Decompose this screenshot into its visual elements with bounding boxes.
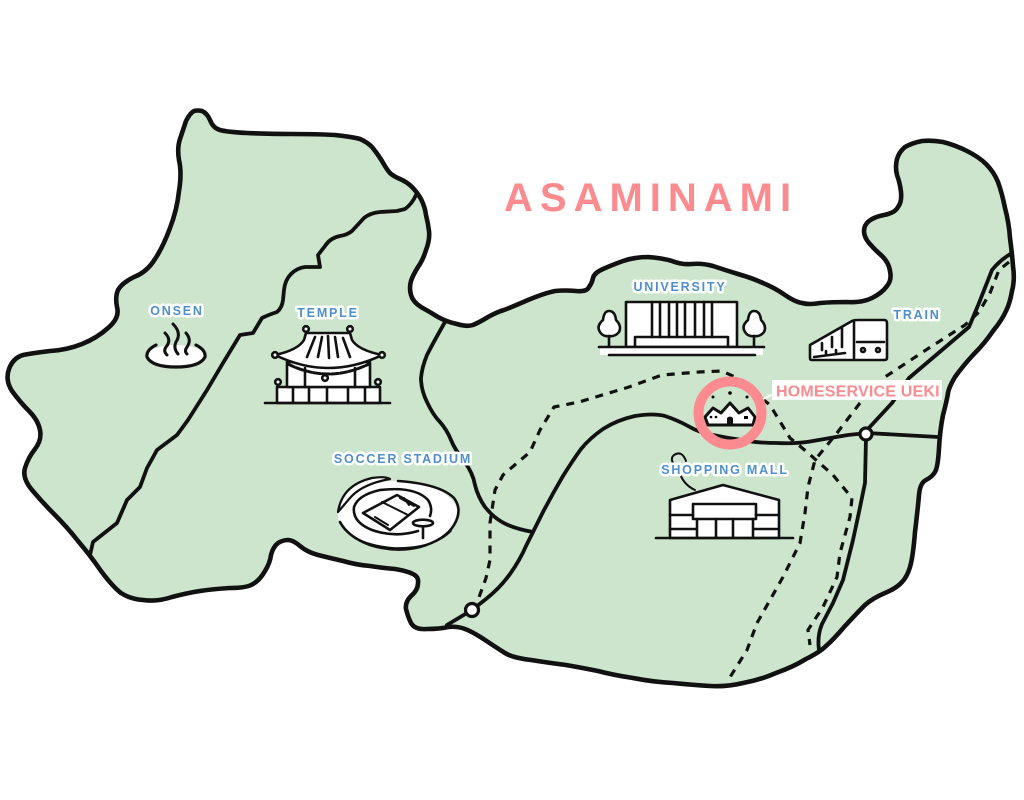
icon: university: [599, 302, 765, 355]
railway branch south: [818, 437, 866, 650]
map: Asaminami land area: [8, 110, 1014, 686]
title: ASAMINAMI: [504, 176, 798, 220]
label: Homeservice Ueki: HOMESERVICE UEKI: [776, 384, 940, 400]
icon: temple: [265, 326, 390, 403]
dashed route east: [727, 262, 1009, 682]
river: central boundary: [421, 322, 533, 532]
label: shopping mall: SHOPPING MALL: [661, 463, 789, 477]
icon: onsen: [147, 324, 205, 367]
label: train: TRAIN: [893, 308, 941, 322]
river: west boundary: [90, 195, 416, 555]
label: soccer stadium: SOCCER STADIUM: [334, 452, 472, 466]
label: onsen: ONSEN: [150, 304, 204, 318]
icon: soccer stadium: [338, 477, 458, 550]
icon: shopping mall: [656, 485, 793, 538]
railway line: [447, 414, 938, 625]
label: university: UNIVERSITY: [633, 280, 727, 294]
icon: train: [810, 320, 887, 360]
dashed route west: [472, 371, 852, 645]
label: temple: TEMPLE: [297, 306, 359, 320]
road loop near mall: [672, 453, 695, 490]
station: east: [860, 428, 872, 440]
railway branch north-east: [867, 253, 1012, 430]
station: west: [466, 604, 478, 616]
icon: home marker: [698, 382, 762, 444]
